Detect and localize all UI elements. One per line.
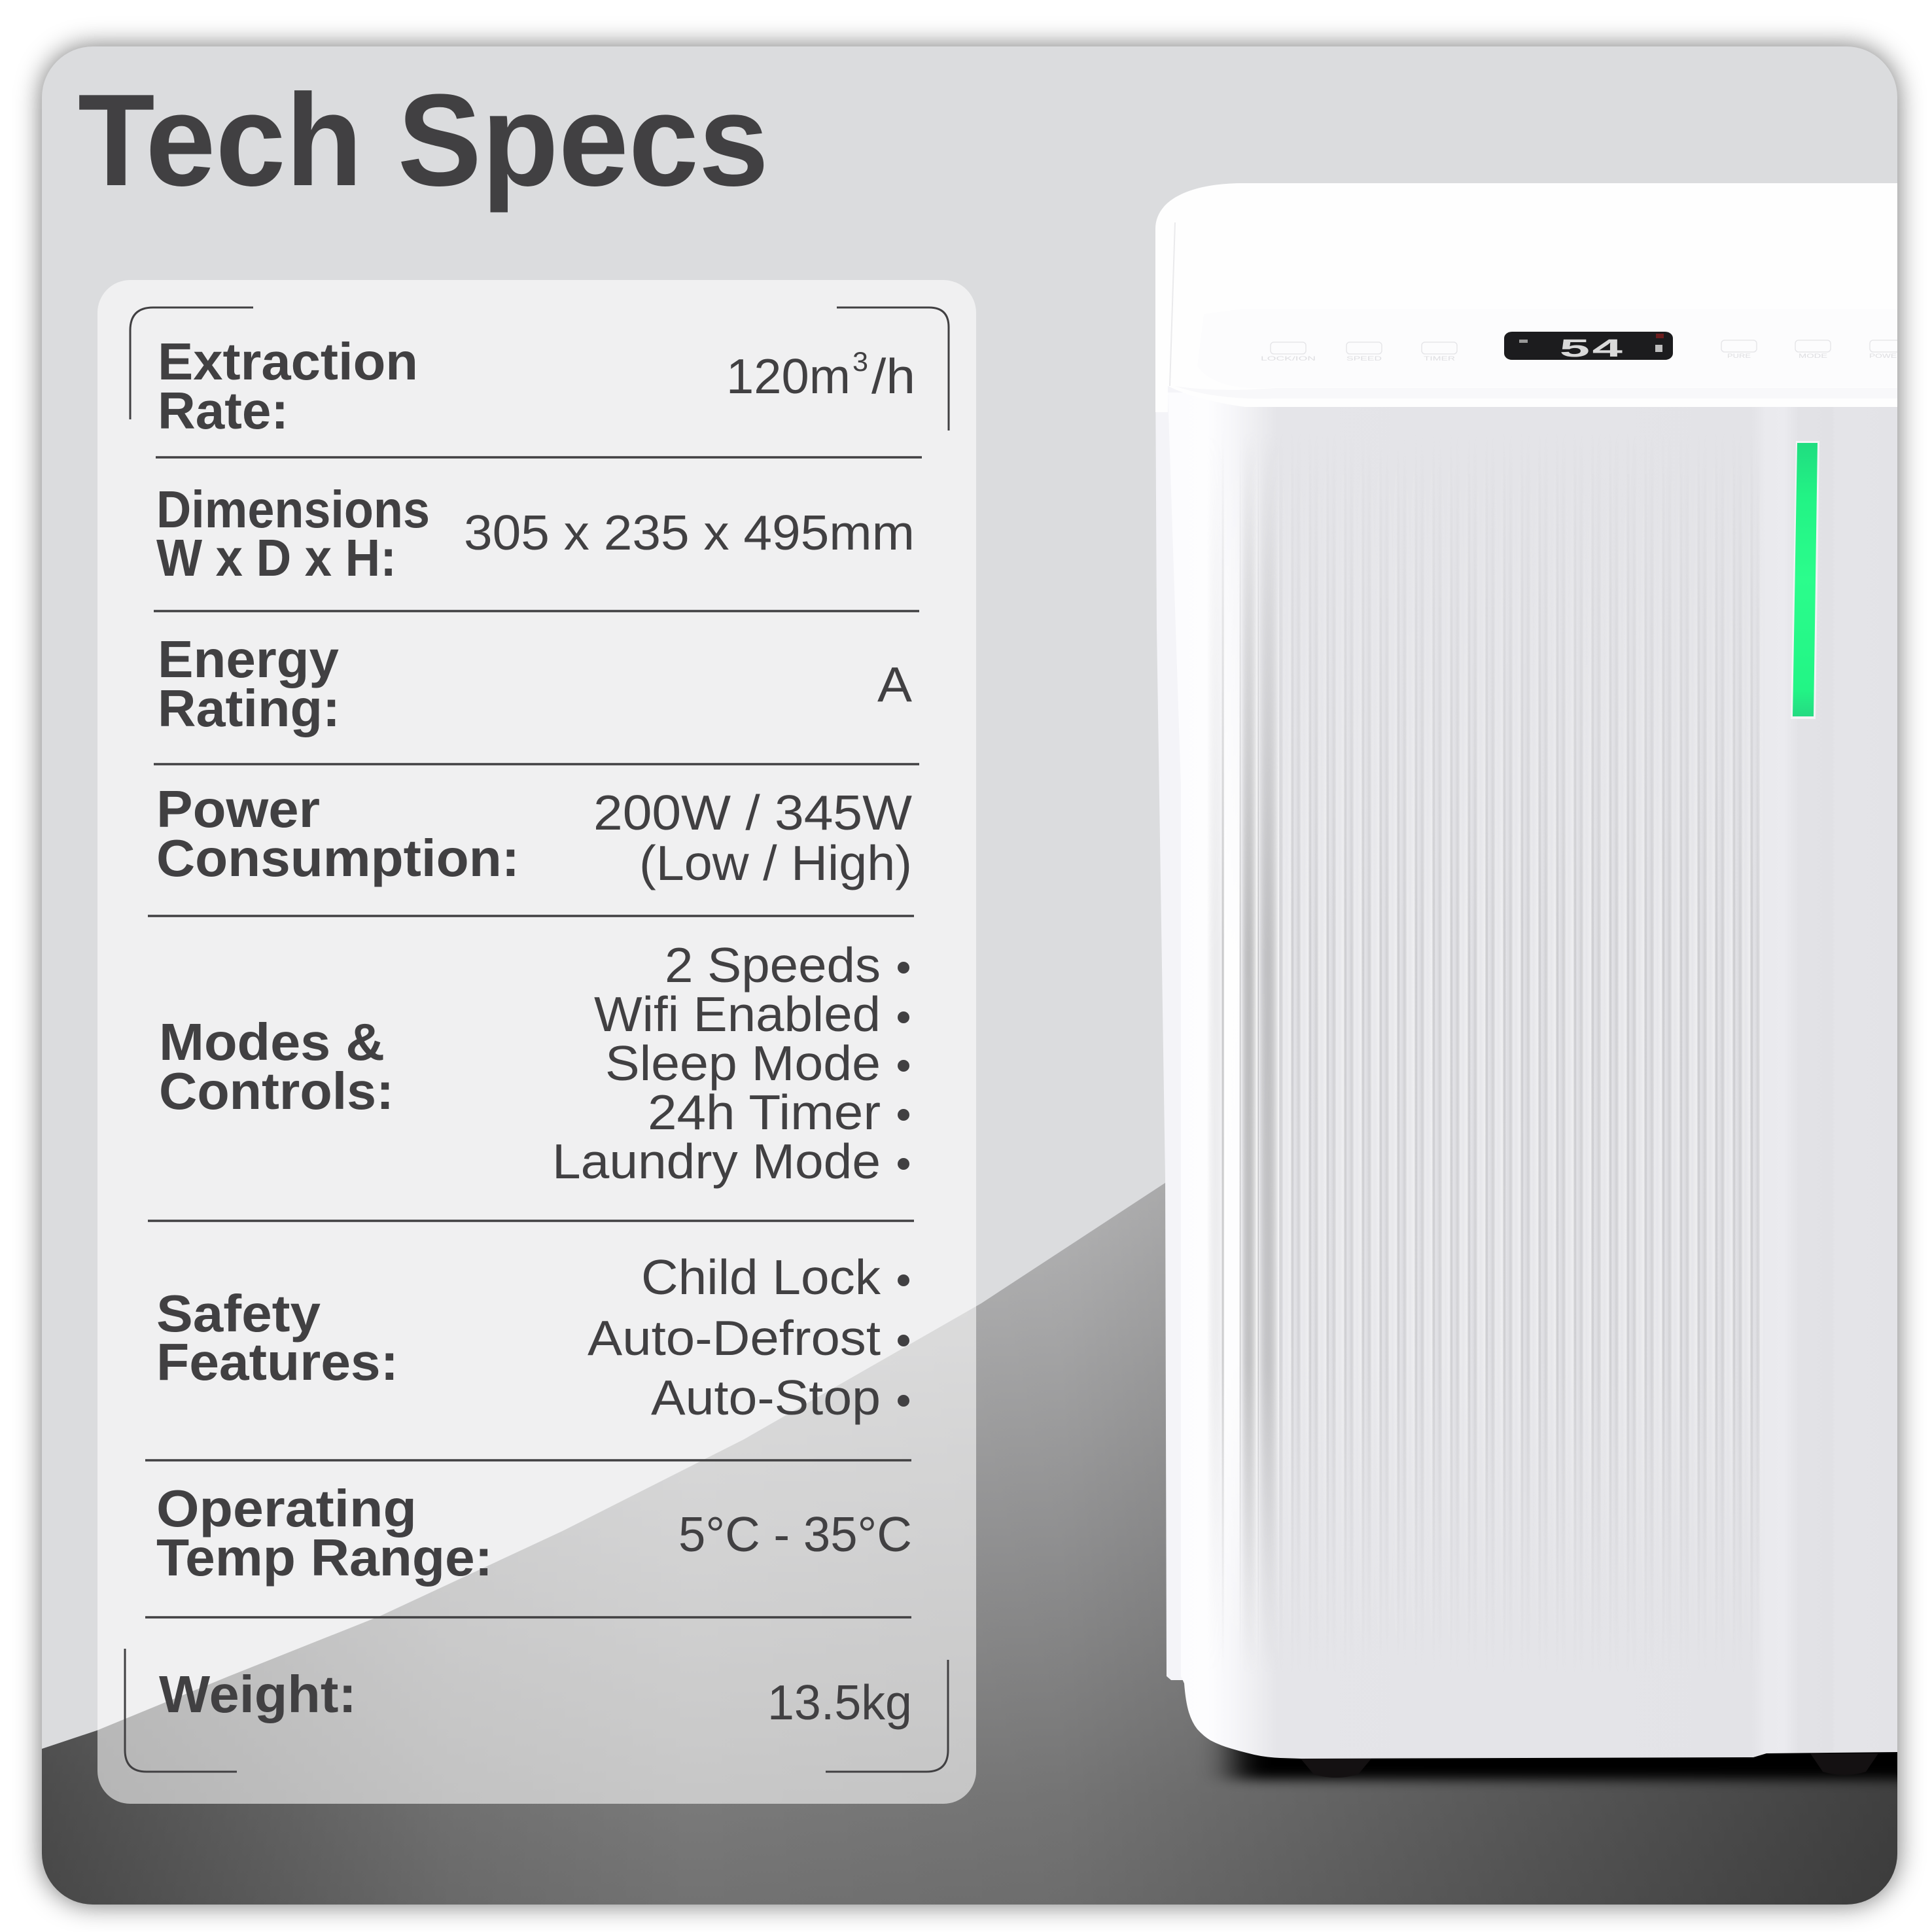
specs card: [97, 280, 976, 1804]
top lid: [1155, 183, 1897, 412]
corner bracket: top left: [130, 307, 253, 419]
corner bracket: top right: [837, 307, 949, 430]
value list: safety features: [588, 1250, 909, 1425]
control panel buttons: TIMER: [1424, 355, 1456, 362]
lid lower band: [1174, 386, 1897, 398]
product feet: [1301, 1753, 1878, 1778]
value list: safety features: Child Lock: [641, 1250, 881, 1305]
value list: modes and controls: 24h Timer: [648, 1085, 881, 1140]
label: extraction rate: Rate:: [158, 381, 289, 440]
value: extraction rate: 120m: [726, 349, 851, 404]
label: energy rating: [158, 630, 340, 737]
LCD display: 54: [1558, 336, 1624, 365]
label: modes and controls: Modes &: [159, 1013, 385, 1071]
value: weight: 13.5kg: [767, 1675, 912, 1730]
body ribs: [1207, 425, 1763, 1753]
value: dimensions: 305 x 235 x 495mm: [464, 505, 915, 560]
label: weight: Weight:: [159, 1665, 357, 1723]
label: operating temp range: [156, 1479, 493, 1587]
label: modes and controls: [159, 1013, 394, 1120]
LCD display: [1504, 332, 1673, 365]
label: operating temp range: Operating: [156, 1479, 417, 1537]
corner bracket: bottom left: [125, 1649, 237, 1772]
value: power consumption: [593, 785, 912, 890]
product side strip: [1155, 366, 1186, 1680]
value list: modes and controls: [552, 938, 909, 1189]
lid seam: [1170, 222, 1175, 386]
control panel buttons: MODE: [1799, 353, 1827, 359]
control panel buttons: SPEED: [1346, 355, 1382, 362]
label: safety features: Safety: [156, 1284, 321, 1343]
label: energy rating: Rating:: [158, 679, 340, 737]
value list: safety features: Auto-Stop: [651, 1370, 881, 1425]
value list: safety features: Auto-Defrost: [588, 1310, 881, 1365]
label: modes and controls: Controls:: [159, 1062, 394, 1120]
value: extraction rate: [726, 346, 915, 404]
label: dimensions: Dimensions: [156, 480, 430, 538]
label: power consumption: [156, 780, 519, 887]
control panel buttons: [1261, 340, 1905, 362]
label: safety features: Features:: [156, 1333, 398, 1391]
corner bracket: bottom right: [826, 1660, 948, 1772]
label: power consumption: Power: [156, 780, 320, 838]
value: power consumption: 200W / 345W: [593, 785, 912, 840]
green indicator light: [1791, 441, 1819, 719]
lid upper panel tone: [1197, 309, 1897, 388]
product body: [1168, 393, 1897, 1759]
value: extraction rate: 3: [852, 346, 868, 377]
title: Tech Specs: [78, 67, 769, 213]
value list: modes and controls: Laundry Mode: [552, 1134, 881, 1189]
floor gradient wedge: [42, 1183, 1897, 1905]
label: energy rating: Energy: [158, 630, 340, 688]
control panel buttons: POWER: [1869, 353, 1904, 359]
label: extraction rate: Extraction: [158, 332, 418, 391]
label: power consumption: Consumption:: [156, 829, 519, 887]
product: dehumidifier: [1155, 183, 1905, 1778]
value list: modes and controls: 2 Speeds: [665, 938, 881, 992]
product shadow on floor: [1233, 1734, 1932, 1780]
label: extraction rate: [158, 332, 418, 440]
value list: modes and controls: Sleep Mode: [605, 1036, 881, 1091]
label: safety features: [156, 1284, 398, 1391]
value: extraction rate: /h: [871, 349, 915, 404]
control panel buttons: LOCK/ION: [1261, 355, 1316, 362]
value: energy rating: A: [877, 657, 912, 712]
control panel buttons: PURE: [1727, 353, 1751, 359]
label: operating temp range: Temp Range:: [156, 1528, 493, 1587]
label: dimensions: W x D x H:: [156, 529, 396, 587]
value: power consumption: (Low / High): [639, 835, 912, 890]
label: dimensions: [156, 480, 430, 587]
value list: modes and controls: Wifi Enabled: [594, 987, 881, 1042]
value: operating temp range: 5°C - 35°C: [678, 1507, 912, 1562]
